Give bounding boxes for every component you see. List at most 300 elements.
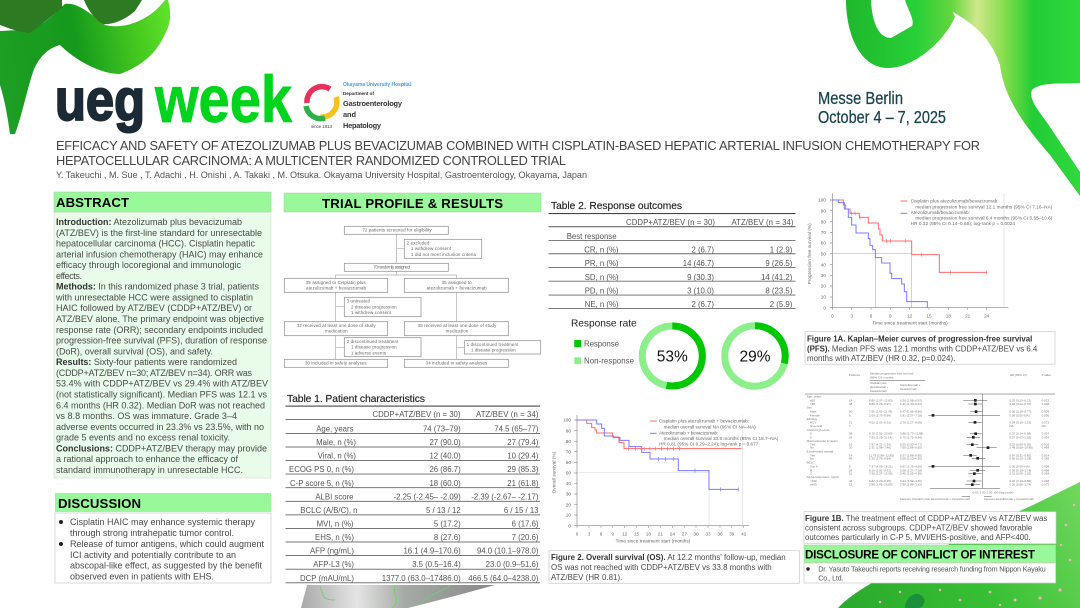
table 2 contents: 14 (41.2) (761, 273, 793, 282)
abstract text: response rate (ORR); secondary endpoints included (56, 325, 263, 335)
chart: figure 1B forest plot: Atezolizumab + (900, 383, 921, 387)
chart: trial flow diagram: 35 assigned to Cisplatin plus (306, 280, 366, 285)
chart: figure 1B forest plot: 2.88 (1.98–16.83) (869, 483, 893, 487)
chart: trial flow diagram: 2 excluded (407, 240, 430, 245)
chart: donut 29%: 29% (739, 348, 771, 365)
abstract body background (54, 212, 271, 478)
chart: figure 1A progression-free survival: 90 (821, 208, 826, 213)
chart: figure 1B forest plot: Yes (810, 453, 815, 457)
table 1 contents: -2.25 (-2.45– -2.09) (394, 492, 461, 501)
abstract text: (DoR), overall survival (OS), and safety. (56, 346, 213, 356)
chart: figure 1A progression-free survival: 0 (831, 314, 834, 319)
table 1 contents: 12 (40.0) (429, 452, 461, 461)
chart: figure 1B forest plot: 5.75 (2.75–8.64) (900, 435, 922, 439)
chart: figure 1A progression-free survival: 30 (821, 273, 826, 278)
chart: figure 1B forest plot: No (810, 456, 814, 460)
chart: figure 1B forest plot: 7 (849, 424, 851, 428)
chart: figure 1B forest plot: 45 (849, 456, 853, 460)
chart: figure 1B forest plot: <400 (810, 479, 817, 483)
title: HEPATOCELLULAR CARCINOMA: A MULTICENTER RANDOMIZED CONTROLLED TRIAL (56, 153, 566, 168)
chart: figure 1B forest plot: bevacizumab (870, 389, 887, 393)
table 2 contents: CDDP+ATZ/BEV (n = 30) (626, 218, 715, 227)
chart: figure 2 overall survival: 60 (566, 460, 571, 465)
chart: figure 2 overall survival: Atezolizumab + bevacizumab: (659, 431, 718, 436)
chart: figure 1B forest plot: 24 (849, 468, 853, 472)
caption: figure 1A (805, 332, 1055, 364)
chart: figure 1B forest plot: NA (1009, 424, 1013, 428)
table 1 contents: ATZ/BEV (n = 34) (476, 410, 539, 419)
chart: figure 1B forest plot: Favours Cisplatin plus atezolizumab + bevacizumab (900, 497, 970, 501)
discussion heading (55, 493, 271, 512)
chart: figure 1A progression-free survival: 0 (823, 305, 826, 310)
chart: figure 1B forest plot: C (810, 472, 813, 476)
chart: figure 1B forest plot: HCV (810, 420, 816, 424)
venue and date: Messe Berlin (818, 88, 903, 108)
chart: trial flow diagram: 35 assigned to (442, 280, 472, 285)
chart: donut 29% (725, 326, 785, 386)
discussion bullets: ICI activity and potentially contribute to an (70, 550, 236, 560)
chart: figure 1B forest plot: NA (1042, 424, 1046, 428)
table 1 contents: Male, n (%) (316, 438, 356, 447)
logo: Okayama University Hospital department: and (343, 110, 356, 119)
chart: figure 2 overall survival: 40 (566, 481, 571, 486)
table 2 contents: 2 (5.9) (770, 300, 793, 309)
disclosure heading (804, 545, 1056, 563)
chart: figure 2 overall survival: 24 (670, 532, 675, 537)
chart: figure 1B forest plot: Patients (849, 373, 860, 377)
chart: trial flow diagram: 30 included in safety analyses (305, 361, 367, 366)
chart: figure 2 overall survival: 33 (705, 532, 711, 537)
table 1 contents: 26 (86.7) (429, 465, 461, 474)
table 1 contents: 94.0 (10.1–978.0) (477, 547, 539, 556)
title: EFFICACY AND SAFETY OF ATEZOLIZUMAB PLUS BEVACIZUMAB COMBINED WITH CISPLATIN-BASED HEPATIC ARTERIAL INFUSION CHEMOTHERAPY FOR (56, 138, 980, 153)
chart: figure 1B forest plot: 0.145 (1042, 456, 1049, 460)
chart: figure 2 overall survival: 10 (566, 513, 571, 518)
chart: figure 1A progression-free survival: 100 (818, 198, 826, 203)
chart: figure 2 overall survival: 12 (622, 532, 628, 537)
chart: figure 2 overall survival: 100 (563, 418, 571, 423)
chart: figure 1B forest plot: P value (1042, 373, 1051, 377)
chart: figure 1B forest plot: 8.80 (3.28–8.97) (869, 402, 891, 406)
chart: figure 2 overall survival: 15 (634, 532, 640, 537)
table 1 contents: 8 (27.6) (434, 533, 461, 542)
chart: figure 1B forest plot: Male (810, 410, 817, 414)
chart: trial flow diagram: 32 received at least one dose of study (297, 323, 376, 328)
decoration: bottom grey organ (301, 585, 495, 608)
chart: figure 1B forest plot: 6.47 (0.86–8.86) (900, 410, 922, 414)
authors: Y. Takeuchi , M. Sue , T. Adachi , H. Onishi , A. Takaki , M. Otsuka. Okayama University Hospital, Gastroenterology, Okayama, Japan (56, 170, 587, 180)
table 2 contents (567, 218, 794, 309)
table 1 contents: Age, years (316, 424, 354, 434)
abstract text: Conclusions: CDDP+ATZ/BEV therapy may provide (56, 443, 267, 453)
chart: trial flow diagram: atezolizumab + bevacizumab (306, 286, 367, 291)
chart: figure 2 overall survival: 0 (576, 532, 579, 537)
chart: figure 1A progression-free survival (807, 193, 1053, 326)
table 2 contents: ATZ/BEV (n = 34) (732, 218, 794, 227)
chart: trial flow diagram: 2 disease progression (351, 304, 397, 309)
table 1 contents: 29 (85.3) (507, 465, 539, 474)
chart: figure 1B forest plot: Etiology (807, 417, 818, 421)
chart: trial flow diagram: atezolizumab + bevacizumab (427, 286, 487, 291)
table 1 contents: ALBI score (315, 492, 354, 501)
chart: figure 1B forest plot: 0.55 (0.18–1.78) (1009, 468, 1031, 472)
chart: trial flow diagram: 35 received at least one dose of study (418, 323, 497, 328)
chart: figure 2 overall survival: 0 (568, 523, 571, 528)
chart: figure 1B forest plot: Sex (807, 406, 812, 410)
chart: figure 1B forest plot: bevacizumab (900, 387, 917, 391)
table 1 contents: 27 (90.0) (429, 438, 461, 447)
discussion bullets: Release of tumor antigens, which could augment (70, 539, 264, 549)
table 1 contents: AFP-L3 (%) (313, 560, 354, 569)
chart: figure 1B forest plot: 7.90 (2.37–13.56) (869, 472, 893, 476)
chart: figure 1A progression-free survival: 20 (821, 284, 826, 289)
heading: trial profile and results: TRIAL PROFILE & RESULTS (322, 196, 503, 211)
chart: figure 1B forest plot: 0.37 (0.14–0.88) (1009, 432, 1031, 436)
abstract text: arterial infusion chemotherapy (HAIC) may enhance (56, 249, 263, 259)
chart: figure 2 overall survival: 30 (566, 492, 571, 497)
chart: figure 1A progression-free survival: 10 (821, 295, 826, 300)
chart: figure 1B forest plot: 0.054 (1042, 435, 1049, 439)
chart: figure 2 overall survival: 21 (658, 532, 663, 537)
chart: figure 1B forest plot: 5.58 (2.27–7.18) (900, 468, 922, 472)
chart: figure 1A progression-free survival: 21 (965, 314, 971, 319)
table 2 contents: Best response (567, 232, 617, 241)
logo: Okayama University Hospital department: Department of (343, 91, 374, 96)
chart: figure 1B forest plot: 2.49 (0.08–10.85) (1009, 446, 1033, 450)
chart: figure 1A progression-free survival: 60 (821, 241, 826, 246)
chart: figure 1B forest plot: 0.26 (0.12–0.70) (1009, 402, 1031, 406)
table 1 contents: 74.5 (65–77) (494, 424, 539, 434)
table 1 contents: -2.39 (-2.67– -2.17) (471, 492, 539, 501)
chart: figure 2 overall survival: 36 (717, 532, 723, 537)
decoration: top-left green organ (0, 0, 170, 134)
table 1 contents: 23.0 (0.9–51.6) (486, 560, 539, 569)
chart: trial flow diagram: 1 did not meet inclusion criteria (411, 252, 477, 257)
legend: response rate (571, 319, 637, 365)
venue and date: October 4 – 7, 2025 (818, 107, 946, 127)
title (56, 138, 980, 168)
chart: figure 1B forest plot: 50 (849, 410, 853, 414)
chart: donut 53% (642, 326, 702, 386)
chart: figure 2 overall survival: 27 (682, 532, 687, 537)
table 2 rules (548, 213, 796, 309)
chart: figure 1A progression-free survival: 18 (946, 314, 951, 319)
chart: trial flow diagram: 72 patients screened for eligibility (362, 228, 432, 233)
chart: figure 1B forest plot: 0.25 (0.10–0.22) (1009, 398, 1031, 402)
chart: figure 1B forest plot: Non-viral (810, 424, 822, 428)
chart: figure 1B forest plot: Favours atezolizumab + bevacizumab (984, 497, 1034, 501)
table 1 contents: 74 (73–79) (423, 424, 461, 434)
chart: figure 1B forest plot: 6.31 (2.40–8.97) (900, 402, 922, 406)
table 1 contents: DCP (mAU/mL) (300, 574, 354, 583)
chart: figure 1B forest plot: 7.69 (2.88–9.65) (900, 446, 922, 450)
caption: figure 1A: months with ATZ/BEV (HR 0.32, p=0.024). (807, 354, 955, 363)
chart: figure 2 overall survival: 70 (566, 449, 571, 454)
table 2 contents: SD, n (%) (585, 273, 619, 282)
chart: figure 2 overall survival (552, 415, 779, 544)
chart: figure 2 overall survival: 80 (566, 439, 571, 444)
abstract text: HAIC followed by ATZ/BEV (CDDP+ATZ/BEV) or (56, 303, 252, 313)
chart: figure 1B forest plot: Child-Pugh score (807, 428, 830, 432)
chart: figure 1A progression-free survival: 12 (907, 314, 913, 319)
table 1 contents: 21 (61.8) (507, 479, 539, 488)
table 2 contents: 3 (10.0) (687, 286, 714, 296)
caption: figure 2: ATZ/BEV (HR 0.81). (551, 573, 622, 582)
chart: figure 1B forest plot: Female (810, 413, 820, 417)
table 1: patient characteristics (286, 394, 540, 583)
chart: trial flow diagram: medication (325, 329, 348, 334)
table 1 contents: Viral, n (%) (318, 452, 356, 461)
chart: figure 1A progression-free survival: 3 (850, 314, 853, 319)
chart: figure 1B forest plot: 8.16 (2.91–8.31) (869, 468, 891, 472)
chart: figure 2 overall survival: 18 (646, 532, 651, 537)
chart: figure 1A progression-free survival: 70 (821, 230, 826, 235)
caption: figure 2 (549, 551, 799, 583)
chart: figure 1B forest plot: 0.20 (0.06–1.74) (1009, 483, 1031, 487)
chart: figure 2 overall survival: 9 (611, 532, 614, 537)
chart: figure 2 overall survival: Cisplatin plus atezolizumab + bevacizumab: (659, 419, 749, 424)
chart: figure 1B forest plot: 48 (849, 402, 853, 406)
caption: figure 1B (804, 512, 1056, 544)
abstract text: ATZ/BEV alone. The primary endpoint was objective (56, 314, 264, 324)
chart: trial flow diagram: 3 untreated (347, 299, 371, 304)
abstract text: 6.4 months (HR 0.32). Median DoR was not reached (56, 400, 265, 410)
caption: figure 1B: outcomes particularly in C-P 5, MVI/EHS-positive, and AFP<400. (805, 533, 1031, 542)
table 1 contents: 16.1 (4.9–170.6) (403, 547, 461, 556)
table 1 contents: CDDP+ATZ/BEV (n = 30) (372, 410, 461, 419)
chart: figure 1B forest plot: 0.014 (1042, 453, 1049, 457)
abstract text: 53.4% with CDDP+ATZ/BEV vs 29.4% with ATZ/BEV (56, 379, 268, 389)
chart: figure 1B forest plot: 14 (849, 453, 853, 457)
table 1 contents: 27 (79.4) (507, 438, 539, 447)
chart: figure 1B forest plot: 6.67 (2.76–4.50) (900, 464, 922, 468)
chart: trial flow diagram: 1 disease progression (351, 345, 397, 350)
heading: trial profile and results (284, 193, 541, 212)
chart: figure 1B forest plot: 24 (849, 435, 853, 439)
caption: figure 1A: Figure 1A. Kaplan–Meier curves of progression-free survival (807, 335, 1032, 344)
chart: figure 1B forest plot: 2.98 (2.84–3.42) (900, 483, 922, 487)
chart: figure 1B forest plot: No (810, 446, 814, 450)
discussion bullets (55, 513, 271, 583)
discussion heading: DISCUSSION (58, 496, 141, 511)
table 2 contents: 14 (46.7) (683, 259, 714, 268)
chart: figure 1B forest plot: 0.00 (0.00–NA) (1009, 464, 1030, 468)
panel: disclosure of conflict of interest (804, 545, 1056, 583)
chart: figure 1A progression-free survival: 50 (821, 251, 826, 256)
abstract text: efficacy through locoregional and immunologic (56, 260, 242, 270)
chart: figure 1A progression-free survival: 80 (821, 219, 826, 224)
chart: figure 1B forest plot: 0.27 (0.07–1.02) (1009, 435, 1031, 439)
chart: figure 1A progression-free survival: 6 (870, 314, 873, 319)
logo: Okayama University Hospital department: Okayama University Hospital (343, 82, 412, 88)
chart: figure 2 overall survival: Overall survival (%) (552, 451, 557, 493)
table 1 rules (286, 406, 540, 583)
chart: figure 2 overall survival: 39 (729, 532, 735, 537)
chart: figure 1B forest plot: 2.09 (2.76–8.84) (869, 413, 891, 417)
panel: abstract (54, 192, 271, 478)
chart: figure 2 overall survival: 30 (693, 532, 699, 537)
chart: figure 1B forest plot: 5.44 (2.52–4.50) (900, 479, 922, 483)
table 2 contents: 1 (2.9) (770, 246, 793, 254)
table 2 contents: PR, n (%) (585, 259, 619, 268)
chart: figure 2 overall survival: 20 (566, 502, 571, 507)
chart: figure 1B forest plot: 0.054 (1042, 472, 1049, 476)
chart: figure 1A progression-free survival: Time since treatment start (months) (872, 321, 948, 326)
chart: figure 2 overall survival: 42 (741, 532, 747, 537)
chart: figure 1B forest plot: 0.007 (1042, 432, 1049, 436)
chart: figure 2 overall survival: median overall survival 33.8 months (95% CI 18.7–NA) (664, 436, 779, 441)
chart: figure 1B forest plot: ≤65 (810, 398, 815, 402)
chart: figure 1B forest plot: 5.58 (2.10–4.50) (900, 456, 922, 460)
logo: ueg week: week (154, 62, 292, 136)
table 1 contents: 6 (17.6) (512, 520, 539, 528)
chart: trial flow diagram: 1 disease progression (471, 348, 516, 353)
chart: figure 1B forest plot: 5 (810, 432, 812, 436)
chart: figure 1B forest plot: 0.22 (0.09–0.55) (1009, 443, 1031, 447)
chart: figure 1B forest plot: 0.34 (0.10–1.18) (1009, 420, 1031, 424)
disclosure text: Co., Ltd. (818, 574, 843, 583)
abstract text (55, 217, 268, 475)
table 2 contents: 2 (6.7) (691, 300, 714, 309)
chart: figure 1B forest plot: 15 (849, 483, 853, 487)
abstract text: a rational approach to enhance the efficacy of (56, 454, 238, 464)
discussion bullets: abscopal-like effect, as suggested by the benefit (70, 561, 262, 571)
abstract heading (54, 192, 271, 212)
chart: figure 1A progression-free survival: median progression free survival 6.4 months (95% CI 5.55–10.6) (915, 216, 1053, 221)
legend: response rate: Non-response (584, 356, 635, 365)
table 1 heading: Table 1. Patient characteristics (287, 394, 425, 405)
chart: figure 1B forest plot: 5.91 (2.27–7.18) (900, 413, 922, 417)
chart: figure 1B forest plot: 10 (849, 443, 853, 447)
chart: figure 2 overall survival: Time since treatment start (months) (616, 539, 691, 544)
chart: trial flow diagram: 2 discontinued treatment (347, 339, 399, 344)
icon: coloured ring (306, 87, 337, 119)
chart: figure 1B forest plot: 20 (849, 446, 853, 450)
table 2 contents: NE, n (%) (585, 300, 619, 309)
chart: figure 1B forest plot: ≥400 (810, 483, 817, 487)
chart: figure 1B forest plot: 5.55 (0.50–4.77) (900, 443, 922, 447)
chart: figure 1B forest plot: 2.70 (2.27–8.09) (900, 420, 922, 424)
abstract text: effects. (56, 271, 82, 281)
chart: figure 1B forest plot: 8.80 (1.97–12.83) (869, 398, 893, 402)
table 1 contents: C-P score 5, n (%) (290, 479, 354, 488)
chart: figure 1B forest plot: 14 (849, 398, 853, 402)
decoration: bottom-right green leaf (838, 482, 1080, 608)
chart: figure 1B forest plot: 44 (849, 479, 853, 483)
chart: figure 1B forest plot: Median progression free survival (870, 371, 914, 375)
caption: figure 1A: (PFS). Median PFS was 12.1 months with CDDP+ATZ/BEV vs 6.4 (807, 344, 1038, 354)
chart: figure 1B forest plot: 5.30 (2.76–8.84) (869, 456, 891, 460)
table 2 contents: 9 (26.5) (765, 259, 793, 268)
caption: figure 1B: consistent across subgroups. CDDP+ATZ/BEV showed favorable (805, 523, 1033, 532)
chart: figure 1B forest plot: 6 (810, 435, 812, 439)
chart: figure 1B forest plot: Yes (810, 443, 815, 447)
chart: figure 1A progression-free survival: 15 (926, 314, 932, 319)
table 2: response outcomes (548, 201, 796, 309)
table 2 contents: 8 (23.5) (765, 286, 793, 296)
chart: figure 1B forest plot: (95% CI), months (870, 375, 894, 379)
chart: figure 1A progression-free survival: Atezolizumab/bevacizumab: (911, 210, 970, 215)
chart: figure 1B forest plot: atezolizumab + (870, 385, 889, 389)
chart: figure 1B forest plot: BCLC (807, 460, 815, 464)
chart: figure 1B forest plot: 21 (849, 420, 853, 424)
chart: figure 1B forest plot: 21 (849, 472, 853, 476)
chart: figure 1B forest plot: 0.090 (1042, 413, 1049, 417)
chart: figure 1B forest plot: 2.31 (1.98–3.46) (869, 446, 891, 450)
chart: trial flow diagram: 1 withdrew consent (411, 246, 452, 251)
chart: figure 1B forest plot: 38 (849, 432, 853, 436)
table 1 contents: 5 (17.2) (434, 520, 461, 528)
chart: figure 1B forest plot: 0.02 1.00 2.00 100 (log scale) (973, 490, 1013, 494)
table 1 contents: 18 (60.0) (429, 479, 461, 488)
chart: figure 1B forest plot: Alpha-fetoprotein, ng/mL (807, 475, 840, 479)
chart: figure 1B forest plot: 8.16 (2.91–10.60) (869, 432, 893, 436)
abstract text: with unresectable HCC were assigned to cisplatin (55, 292, 253, 302)
table 2 heading: Table 2. Response outcomes (551, 201, 682, 212)
chart: figure 1B forest plot: 0.998 (1042, 464, 1049, 468)
abstract text: hepatocellular carcinoma (HCC). Cisplatin hepatic (56, 239, 256, 249)
chart: figure 1B forest plot: Cisplatin plus (870, 381, 887, 385)
abstract text: standard immunotherapy in unresectable HCC. (56, 465, 243, 475)
chart: figure 1A progression-free survival: median progression free survival 12.1 months (95% CI 7.16–NA) (915, 204, 1053, 209)
logo: ueg week: ueg (55, 68, 145, 133)
chart: figure 1B forest plot: 7.90 (3.29–11.14) (869, 435, 892, 439)
abstract text: vs 8.8 months. OS was immature. Grade 3–4 (56, 411, 237, 421)
chart: figure 1B forest plot: 11.78 (2.88–12.85) (869, 453, 894, 457)
logo: Okayama University Hospital department (306, 82, 412, 130)
table 1 contents: 6 / 15 / 13 (504, 506, 538, 515)
caption: figure 2: Figure 2. Overall survival (OS). At 12.2 months' follow-up, median (551, 553, 786, 562)
chart: figure 1B forest plot: 7.97 (4.21–1.24) (869, 443, 891, 447)
chart: trial flow diagram: medication (446, 329, 469, 334)
table 1 contents: 10 (29.4) (507, 452, 539, 461)
table 1 contents: BCLC (A/B/C), n (300, 506, 358, 515)
chart: figure 1B forest plot: 0.009 (1042, 410, 1049, 414)
chart: figure 2 overall survival: HR 0.81 (95% CI 0.29–2.24); log-rank p = 0.677 (659, 442, 759, 447)
chart: figure 1A progression-free survival: 40 (821, 262, 826, 267)
table 1 contents: EHS, n (%) (315, 533, 354, 542)
chart: figure 1B forest plot: 0.023 (1042, 398, 1049, 402)
chart: figure 1B forest plot: HR (95% CI) (1010, 373, 1027, 377)
abstract text: Results: Sixty-four patients were randomized (56, 357, 237, 367)
logo: Okayama University Hospital department: Gastroenterology (343, 99, 403, 108)
chart: trial flow diagram: 1 discontinued treatment (467, 342, 519, 347)
table 2 contents: CR, n (%) (584, 246, 619, 254)
chart: figure 1B forest plot: 0.36 (0.18–0.77) (1009, 410, 1031, 414)
chart: figure 1B forest plot: 5.45 (2.65–4.50) (900, 472, 922, 476)
chart: figure 1B forest plot: 0.002 (1042, 443, 1049, 447)
chart: trial flow diagram: 1 adverse events (351, 350, 387, 355)
chart: figure 2 overall survival: median overall survival NA (95% CI NA–NA) (664, 425, 756, 430)
chart: figure 1B forest plot: 0.50 (0.22–1.28) (1009, 456, 1031, 460)
disclosure text (804, 563, 1056, 583)
chart: figure 1B forest plot: 0 or A (810, 464, 818, 468)
chart: figure 1B forest plot: 7.56 (3.65–11.78) (869, 410, 892, 414)
chart: figure 1B forest plot: 6.30 (2.98–8.97) (900, 398, 922, 402)
abstract text: Introduction: Atezolizumab plus bevacizumab (56, 217, 242, 227)
chart: figure 2 overall survival: 3 (588, 532, 591, 537)
chart: figure 1A progression-free survival: Progression free survival (%) (807, 223, 812, 284)
discussion bullets: observed even in patients with EHS. (70, 572, 214, 582)
chart: figure 2 overall survival: 6 (600, 532, 603, 537)
chart: figure 1B forest plot: 7.37 (4.09–18.21) (869, 464, 893, 468)
abstract text: grade 5 events and no excess renal toxicity. (56, 433, 230, 443)
chart: figure 1A progression-free survival: Cisplatin plus atezolizumab/bevacizumab: (911, 198, 999, 203)
chart: figure 1B forest plot: 8 (849, 413, 851, 417)
abstract text: (not statistically significant). Median PFS was 12.1 vs (56, 390, 268, 400)
chart: figure 1A progression-free survival: 9 (889, 314, 892, 319)
chart: figure 1B forest plot: 4.02 (2.02–8.31) (869, 420, 891, 424)
